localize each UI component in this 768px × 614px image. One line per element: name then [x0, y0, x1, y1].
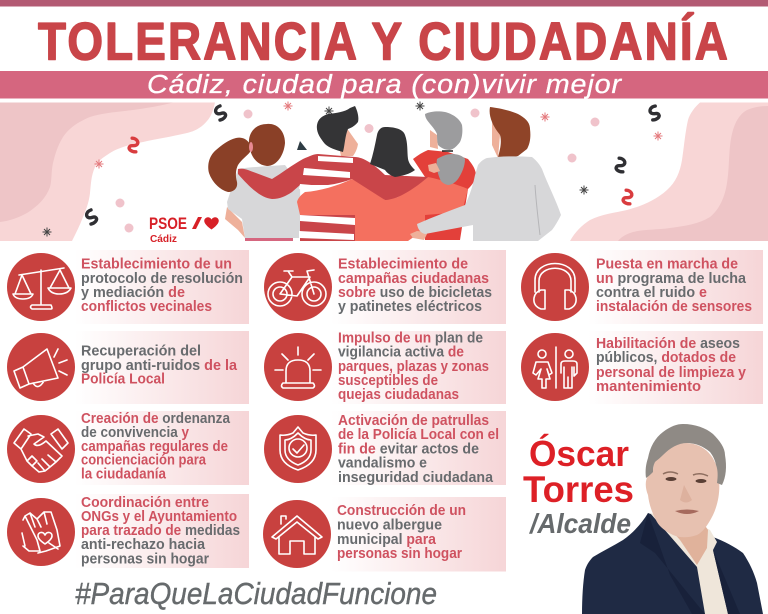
left background blobs — [0, 102, 215, 241]
person: grey-haired woman — [425, 111, 465, 185]
logo city: Cádiz — [150, 233, 177, 245]
text block: ONGs y el Ayuntamiento — [81, 509, 237, 525]
text block: contra el ruido e — [596, 285, 707, 301]
text block: inseguridad ciudadana — [338, 470, 494, 486]
text block: Establecimiento de — [338, 256, 468, 272]
text block: campañas ciudadanas — [338, 271, 489, 287]
text block: de convivencia y — [81, 425, 189, 441]
text block: grupo anti-ruidos de la — [81, 358, 238, 374]
text block: Recuperación del — [81, 344, 201, 360]
text block: susceptibles de — [338, 373, 438, 389]
text block: Activación de patrullas — [338, 413, 489, 429]
text block: municipal para — [337, 532, 437, 548]
icon: handshake — [7, 415, 75, 483]
PSOE logo: PSOE — [149, 214, 187, 233]
decorative asterisks — [42, 102, 662, 236]
text block: Creación de ordenanza — [81, 411, 231, 427]
hair — [317, 106, 358, 152]
red shirt of grey-haired woman — [413, 150, 476, 240]
text block: sobre uso de bicicletas — [338, 285, 492, 301]
icon: hands with heart — [7, 498, 75, 566]
waistband — [245, 238, 293, 241]
lower torso — [300, 210, 356, 241]
text block: parques, plazas y zonas — [338, 359, 489, 375]
subtitle: Cádiz, ciudad para (con)vivir mejor — [147, 71, 623, 99]
subtitle band — [0, 71, 768, 99]
hair tie — [249, 142, 253, 152]
text block — [337, 503, 466, 562]
text block: para trazado de medidas — [81, 523, 240, 539]
icon: house — [263, 500, 331, 568]
text block: fin de evitar actos de — [338, 442, 479, 458]
text block: y patinetes eléctricos — [338, 299, 482, 315]
text block: personas sin hogar — [81, 552, 209, 568]
icon: bicycle — [264, 253, 332, 321]
candidate photo — [582, 424, 763, 614]
text block: Coordinación entre — [81, 495, 209, 511]
braid — [437, 154, 465, 185]
decorative squiggles — [83, 105, 662, 225]
text block: protocolo de resolución — [81, 271, 243, 287]
panel: conflictos vecinales — [7, 250, 249, 324]
text block: Habilitación de aseos — [596, 336, 740, 352]
suit — [582, 513, 763, 614]
hand — [428, 163, 440, 173]
panel: albergue — [263, 497, 506, 572]
text block — [81, 256, 243, 315]
panel: ordenanza — [7, 411, 249, 485]
long hair — [370, 127, 415, 177]
text block — [338, 413, 499, 486]
ponytail — [208, 138, 250, 192]
text block: campañas regulares de — [81, 439, 228, 455]
jacket fold — [535, 185, 540, 235]
text block: conflictos vecinales — [81, 299, 212, 315]
panel: bicicletas — [264, 250, 506, 324]
candidate name: Torres — [523, 469, 634, 510]
text block: concienciación para — [81, 452, 207, 468]
icon: siren — [264, 333, 332, 401]
person: woman with coral jacket — [297, 127, 476, 241]
icon: shield — [264, 415, 332, 483]
decorative triangle — [297, 141, 307, 150]
text block: anti-rechazo hacia — [81, 537, 206, 553]
text block — [596, 256, 752, 315]
text block: personas sin hogar — [337, 546, 462, 562]
text block: vandalismo e — [338, 456, 427, 472]
face — [338, 127, 358, 156]
logo slash — [192, 217, 202, 229]
text block: vigilancia activa de — [338, 344, 464, 360]
text block — [338, 256, 492, 315]
arm — [225, 207, 245, 238]
panel: patrullas — [264, 411, 506, 486]
group of people seen from behind — [208, 106, 561, 241]
text block: quejas ciudadanas — [338, 387, 459, 403]
head — [249, 124, 285, 166]
PSOE logo — [149, 214, 219, 245]
panel: grupo anti-ruidos — [7, 331, 249, 404]
hashtag: #ParaQueLaCiudadFuncione — [75, 576, 437, 611]
neck — [430, 130, 438, 149]
person: man with striped shirt — [238, 106, 385, 241]
text block: nuevo albergue — [337, 518, 442, 534]
arm around friend — [238, 154, 385, 200]
coral jacket — [297, 177, 468, 241]
icon: scales — [7, 253, 75, 321]
text block: la ciudadanía — [81, 466, 167, 482]
right background blobs — [570, 102, 768, 241]
panel: vigilancia — [264, 330, 506, 404]
hair — [490, 107, 530, 157]
face — [492, 122, 500, 158]
icon: heart — [204, 217, 219, 230]
top — [227, 165, 301, 238]
shirt stripes — [299, 156, 353, 191]
panel: ruido — [521, 250, 763, 324]
text block: y mediación de — [81, 285, 185, 301]
icon: headphones — [521, 253, 589, 321]
dark arm — [385, 175, 428, 200]
decorative dots — [116, 108, 600, 232]
text block: Policía Local — [81, 372, 165, 388]
choker — [442, 150, 453, 152]
face — [646, 443, 719, 537]
text block: Construcción de un — [337, 503, 466, 519]
hair — [425, 111, 462, 150]
panel: ONGs — [7, 494, 249, 568]
text block — [338, 330, 489, 403]
jacket — [417, 156, 561, 241]
text block: instalación de sensores — [596, 299, 752, 315]
shirt — [650, 513, 728, 614]
text block: públicos, dotados de — [596, 350, 736, 366]
hair — [646, 424, 726, 485]
person: woman with ponytail — [208, 124, 301, 241]
text block — [596, 336, 746, 395]
hand — [410, 231, 428, 240]
text block — [81, 344, 238, 388]
text block: Establecimiento de un — [81, 256, 232, 272]
candidate name — [523, 432, 634, 539]
text block: de la Policía Local con el — [338, 427, 499, 443]
left lapel — [640, 513, 705, 614]
panel: aseos — [521, 331, 763, 404]
person: man with grey jacket — [410, 107, 561, 241]
text block — [81, 495, 240, 568]
text block: Impulso de un plan de — [338, 330, 483, 346]
text block: personal de limpieza y — [596, 365, 746, 381]
facial features — [663, 472, 708, 514]
text block — [81, 411, 231, 482]
neck — [655, 512, 708, 565]
top bar — [0, 0, 768, 6]
illustration banner — [0, 102, 768, 245]
text block: un programa de lucha — [596, 271, 747, 287]
candidate name: Óscar — [529, 432, 629, 474]
icon: megaphone — [7, 333, 75, 401]
right lapel — [713, 550, 740, 614]
text block: mantenimiento — [596, 379, 701, 395]
text block: Puesta en marcha de — [596, 256, 738, 272]
icon: restroom — [521, 333, 589, 401]
role: /Alcalde — [528, 508, 631, 539]
